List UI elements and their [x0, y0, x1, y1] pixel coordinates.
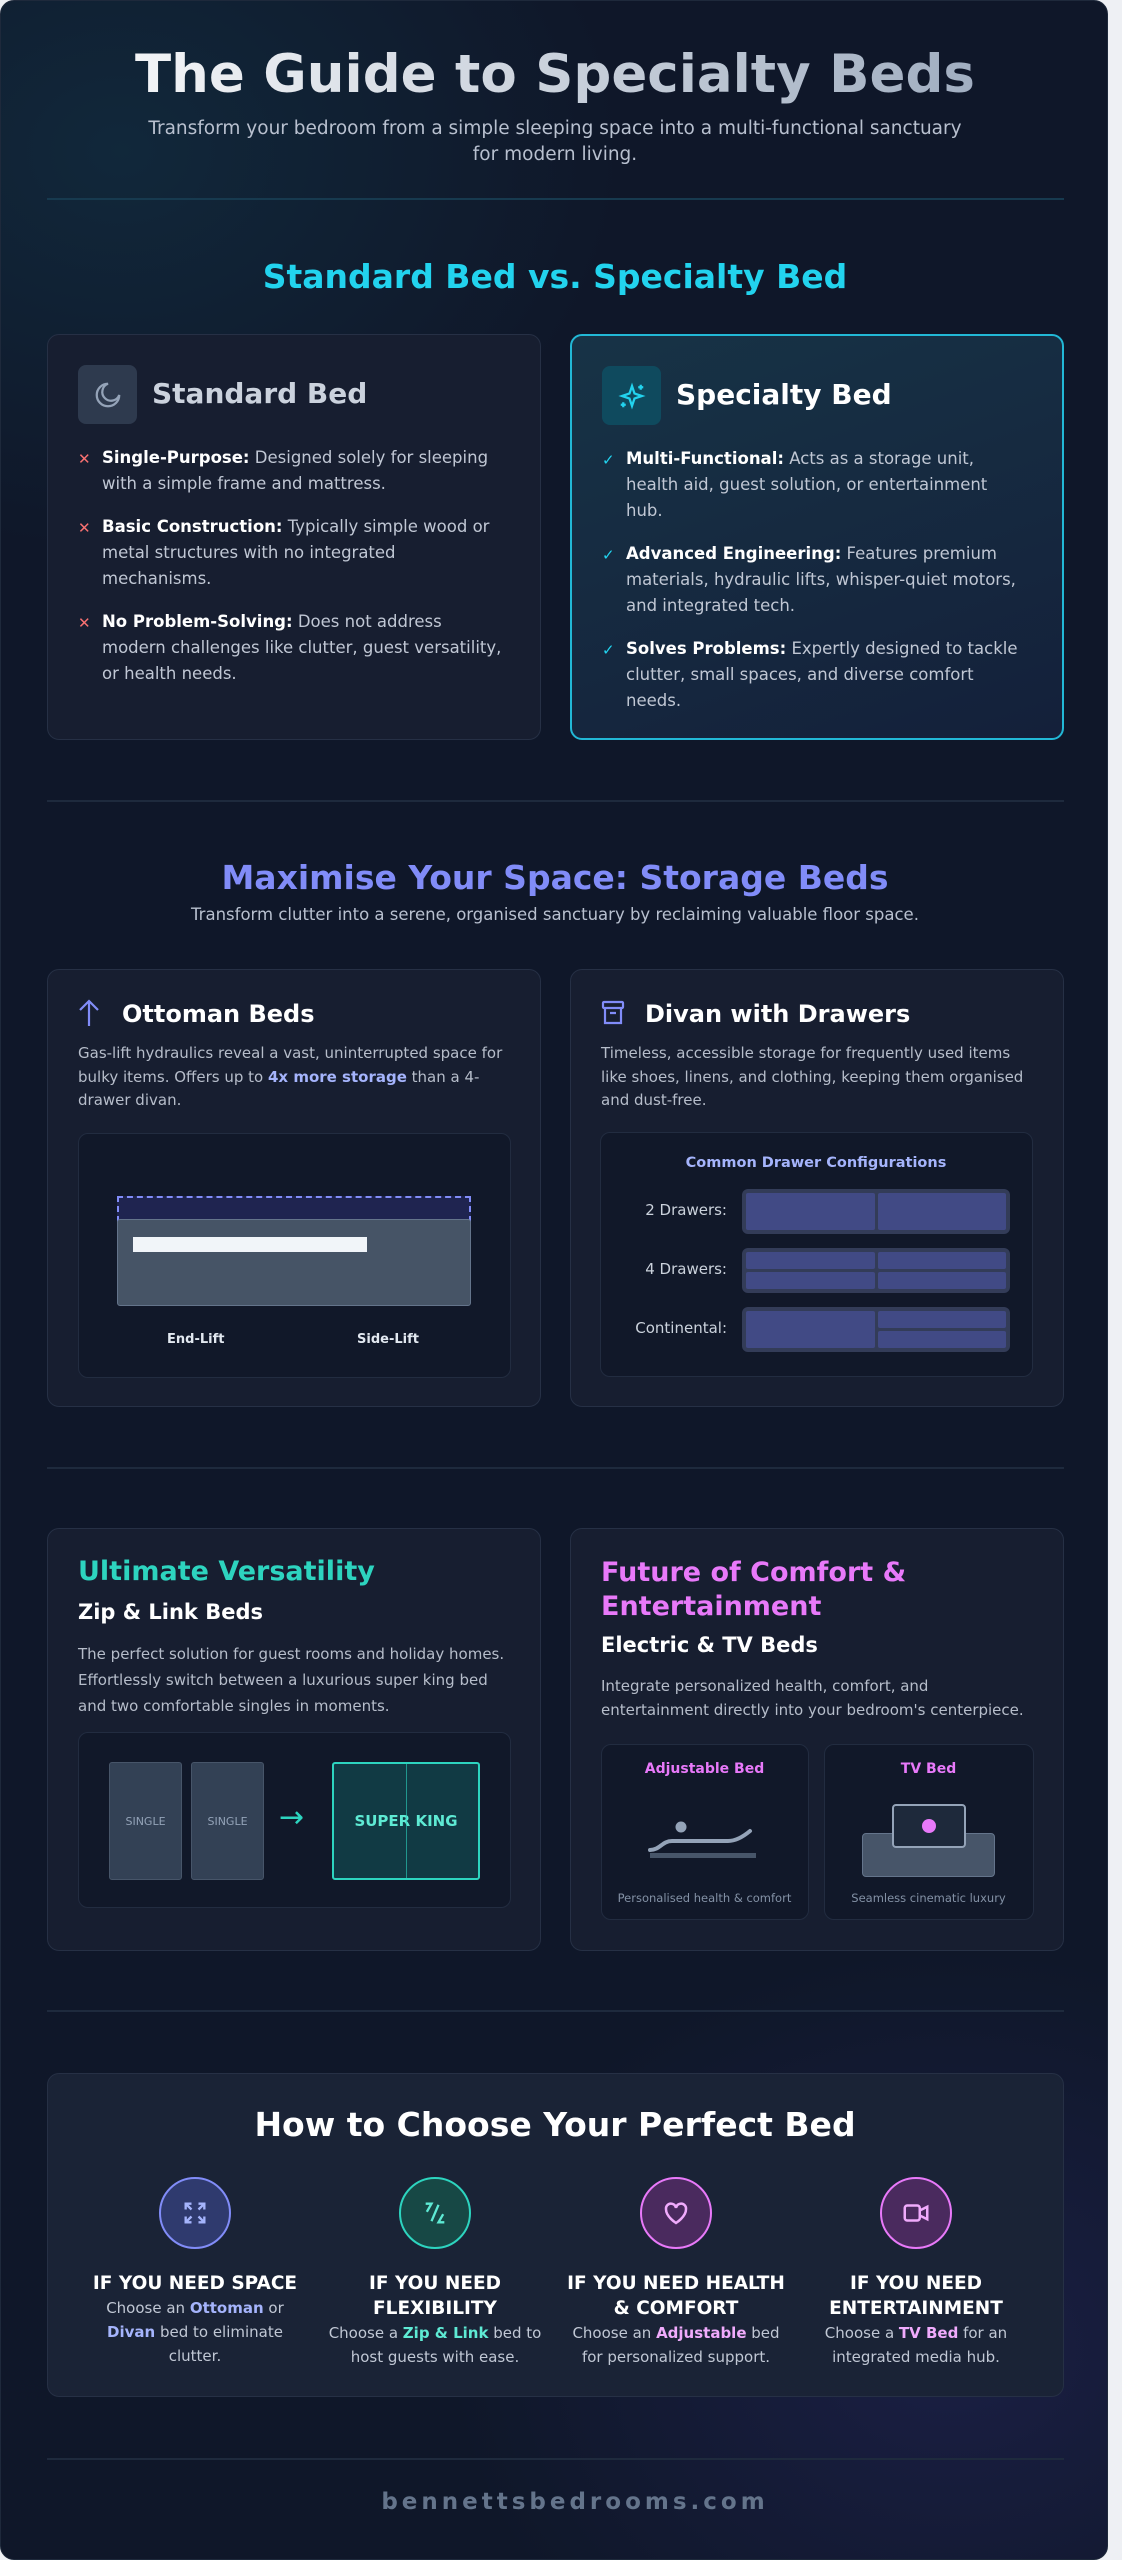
text: ottoman: Gas-lift hydraulics reveal a vast, uninterrupted space for bulky items. Offers up to 4x more storage than a 4-drawer divan. — [78, 1044, 502, 1109]
list: drawbacks — [78, 448, 501, 683]
panel: zip & link — [47, 1528, 541, 1951]
title — [1, 39, 1109, 111]
panel: electric & tv — [570, 1528, 1064, 1951]
diagram: drawer configurations: Common Drawer Configurations — [686, 1155, 946, 1171]
diagram: singles to super king: → — [279, 1800, 304, 1835]
choice: space: Choose an Ottoman or Divan bed to eliminate clutter. — [106, 2299, 284, 2365]
list: benefits: ✓ — [602, 641, 615, 659]
list: benefits: ✓ — [602, 546, 615, 564]
diagram: singles to super king: SUPER KING — [354, 1812, 458, 1830]
title: The Guide to Specialty Beds — [135, 44, 975, 105]
text: zip: The perfect solution for guest rooms and holiday homes. Effortlessly switch between a luxurious super king bed and two comfortable singles in moments. — [78, 1645, 504, 1715]
icon: link — [399, 2177, 471, 2249]
sub-panel: tv bed: TV Bed — [901, 1761, 956, 1777]
choice: flexibility: Choose a Zip & Link bed to host guests with ease. — [329, 2324, 541, 2366]
heading: specialty bed: Specialty Bed — [676, 378, 892, 411]
choice: health — [567, 2177, 785, 2366]
sub-panel: tv bed — [824, 1744, 1034, 1920]
subheading: Transform clutter into a serene, organised sanctuary by reclaiming valuable floor space. — [191, 905, 919, 924]
choice: space: IF YOU NEED SPACE — [93, 2273, 297, 2294]
icon: up arrow — [79, 1000, 99, 1026]
panel: ottoman beds — [47, 969, 541, 1407]
list: benefits: Advanced Engineering: Features premium materials, hydraulic lifts, whisper-quiet motors, and integrated tech. — [626, 544, 1016, 615]
diagram: singles to super king — [78, 1732, 511, 1908]
heading: how to choose: How to Choose Your Perfect Bed — [254, 2105, 856, 2144]
icon: archive — [602, 1000, 624, 1024]
choice: flexibility: IF YOU NEED FLEXIBILITY — [369, 2273, 501, 2319]
diagram: singles to super king: SINGLE — [125, 1814, 166, 1828]
footer: bennettsbedrooms.com — [381, 2489, 769, 2515]
list: drawbacks: Single-Purpose: Designed solely for sleeping with a simple frame and mattress. — [102, 448, 488, 493]
icon: moon — [78, 365, 137, 424]
icon: sparkles — [602, 366, 661, 425]
sub-panel: adjustable bed — [601, 1744, 809, 1920]
list: drawbacks: Basic Construction: Typically simple wood or metal structures with no integrated mechanisms. — [102, 517, 489, 588]
diagram: ottoman lift: End-Lift — [167, 1332, 224, 1347]
choice: entertainment: IF YOU NEED ENTERTAINMENT — [829, 2273, 1003, 2319]
list: drawbacks: ✕ — [78, 614, 91, 632]
list: drawbacks: ✕ — [78, 450, 91, 468]
choice: space — [93, 2177, 297, 2365]
subtitle: Transform your bedroom from a simple sleeping space into a multi-functional sanctuary for modern living. — [148, 118, 962, 165]
panel: specialty bed — [570, 334, 1064, 740]
subheading: electric & tv: Electric & TV Beds — [601, 1633, 818, 1657]
choice: entertainment: Choose a TV Bed for an integrated media hub. — [825, 2324, 1007, 2366]
list: benefits: Solves Problems: Expertly designed to tackle clutter, small spaces, and diverse comfort needs. — [626, 639, 1018, 710]
heading: versatility: Ultimate Versatility — [78, 1556, 375, 1587]
choice: health: IF YOU NEED HEALTH & COMFORT — [567, 2273, 785, 2319]
sub-panel: adjustable bed: Adjustable Bed — [645, 1761, 764, 1777]
heading: ottoman: Ottoman Beds — [122, 1000, 315, 1028]
diagram: ottoman lift: Side-Lift — [357, 1332, 419, 1347]
text: electric: Integrate personalized health, comfort, and entertainment directly into your bedroom's centerpiece. — [601, 1677, 1024, 1719]
icon: heart — [640, 2177, 712, 2249]
list: benefits — [602, 449, 1018, 710]
text: 4 Drawers: — [645, 1260, 727, 1278]
diagram: ottoman lift — [78, 1133, 511, 1378]
icon: video — [880, 2177, 952, 2249]
list: drawbacks: ✕ — [78, 519, 91, 537]
heading: divan: Divan with Drawers — [645, 1000, 910, 1028]
list: drawbacks: No Problem-Solving: Does not address modern challenges like clutter, guest versatility, or health needs. — [102, 612, 501, 683]
text: Continental: — [635, 1319, 727, 1337]
diagram: singles to super king: SINGLE — [207, 1814, 248, 1828]
diagram: drawer configurations — [600, 1132, 1033, 1377]
heading: storage beds: Maximise Your Space: Storage Beds — [221, 858, 889, 897]
choice: entertainment — [825, 2177, 1007, 2366]
panel: standard bed — [47, 334, 541, 740]
sub-panel: tv bed: Seamless cinematic luxury — [851, 1891, 1006, 1905]
text: divan: Timeless, accessible storage for frequently used items like shoes, linens, and clothing, keeping them organised and dust-free. — [601, 1044, 1023, 1109]
heading: comfort & entertainment: Future of Comfort & Entertainment — [601, 1557, 906, 1622]
text: 2 Drawers: — [645, 1201, 727, 1219]
choice: flexibility — [329, 2177, 541, 2366]
list: benefits: ✓ — [602, 451, 615, 469]
panel: divan drawers — [570, 969, 1064, 1407]
heading: comparison: Standard Bed vs. Specialty Bed — [263, 257, 847, 296]
panel: how to choose — [47, 2073, 1064, 2397]
icon: expand — [159, 2177, 231, 2249]
sub-panel: adjustable bed: Personalised health & comfort — [618, 1891, 791, 1905]
choice: health: Choose an Adjustable bed for personalized support. — [572, 2324, 780, 2366]
subheading: zip & link: Zip & Link Beds — [78, 1600, 263, 1624]
list: benefits: Multi-Functional: Acts as a storage unit, health aid, guest solution, or entertainment hub. — [626, 449, 987, 520]
heading: standard bed: Standard Bed — [152, 377, 367, 410]
